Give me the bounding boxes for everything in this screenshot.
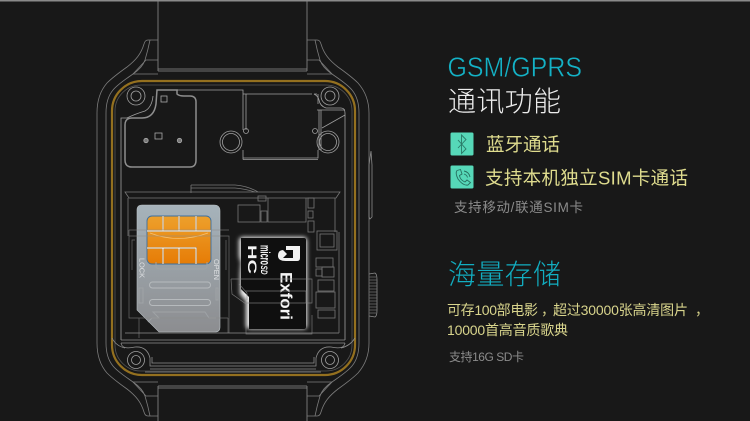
card overlay lines bbox=[231, 279, 312, 334]
icon: phone bbox=[450, 166, 474, 188]
icon: bluetooth bbox=[450, 132, 474, 156]
SIM slots and ridges bbox=[139, 262, 218, 322]
housing rails bbox=[121, 333, 345, 343]
storage description bbox=[447, 302, 709, 338]
storage description: ， bbox=[695, 302, 709, 318]
microSD card bbox=[231, 237, 312, 334]
SIM tray label: OPEN: OPEN bbox=[212, 259, 219, 280]
screw posts bbox=[127, 87, 339, 368]
watch lugs bbox=[97, 40, 369, 416]
storage description: ， bbox=[541, 302, 555, 318]
feature: SIM calling: 支持本机独立SIM卡通话 bbox=[485, 168, 688, 188]
micro label: micro bbox=[258, 245, 274, 265]
inner case outline bbox=[115, 85, 352, 371]
small connector marks bbox=[144, 96, 182, 143]
feature: 蓝牙通话: 蓝牙通话 bbox=[486, 134, 560, 155]
smartwatch line drawing bbox=[97, 1, 377, 421]
SD label: SD bbox=[259, 266, 269, 275]
SIM tray label: LOCK: LOCK bbox=[138, 258, 144, 278]
SIM body bbox=[137, 205, 220, 332]
heading: GSM/GPRS: GSM/GPRS bbox=[448, 52, 582, 82]
storage description: 超过30000张高清图片 bbox=[553, 302, 688, 318]
storage description: 可存100部电影 bbox=[447, 302, 538, 318]
heading: 通讯功能: 通讯功能 bbox=[448, 86, 561, 117]
microSD logo mark bbox=[278, 246, 300, 261]
display bracket bbox=[121, 90, 345, 340]
lower frame bbox=[112, 338, 355, 372]
board detail bbox=[125, 185, 340, 333]
SIM card bbox=[129, 205, 229, 338]
gold frame ring bbox=[112, 81, 355, 375]
antenna contour bbox=[125, 90, 196, 167]
card body bbox=[241, 238, 306, 329]
side button bbox=[369, 151, 372, 219]
heading: 海量存储: 海量存储 bbox=[448, 259, 561, 290]
HC label: HC bbox=[245, 245, 259, 275]
SIM chip bbox=[147, 216, 211, 264]
SIM tray frame bbox=[129, 230, 229, 338]
storage description: 10000首高音质歌典 bbox=[447, 322, 568, 338]
card glow bbox=[239, 237, 307, 329]
crown bbox=[369, 273, 377, 317]
watch strap bbox=[158, 1, 307, 421]
note: carrier support: 支持移动/联通SIM卡 bbox=[454, 200, 583, 215]
note: SD card support: 支持16G SD卡 bbox=[449, 349, 524, 364]
Exfori brand: Exfori bbox=[276, 272, 296, 320]
